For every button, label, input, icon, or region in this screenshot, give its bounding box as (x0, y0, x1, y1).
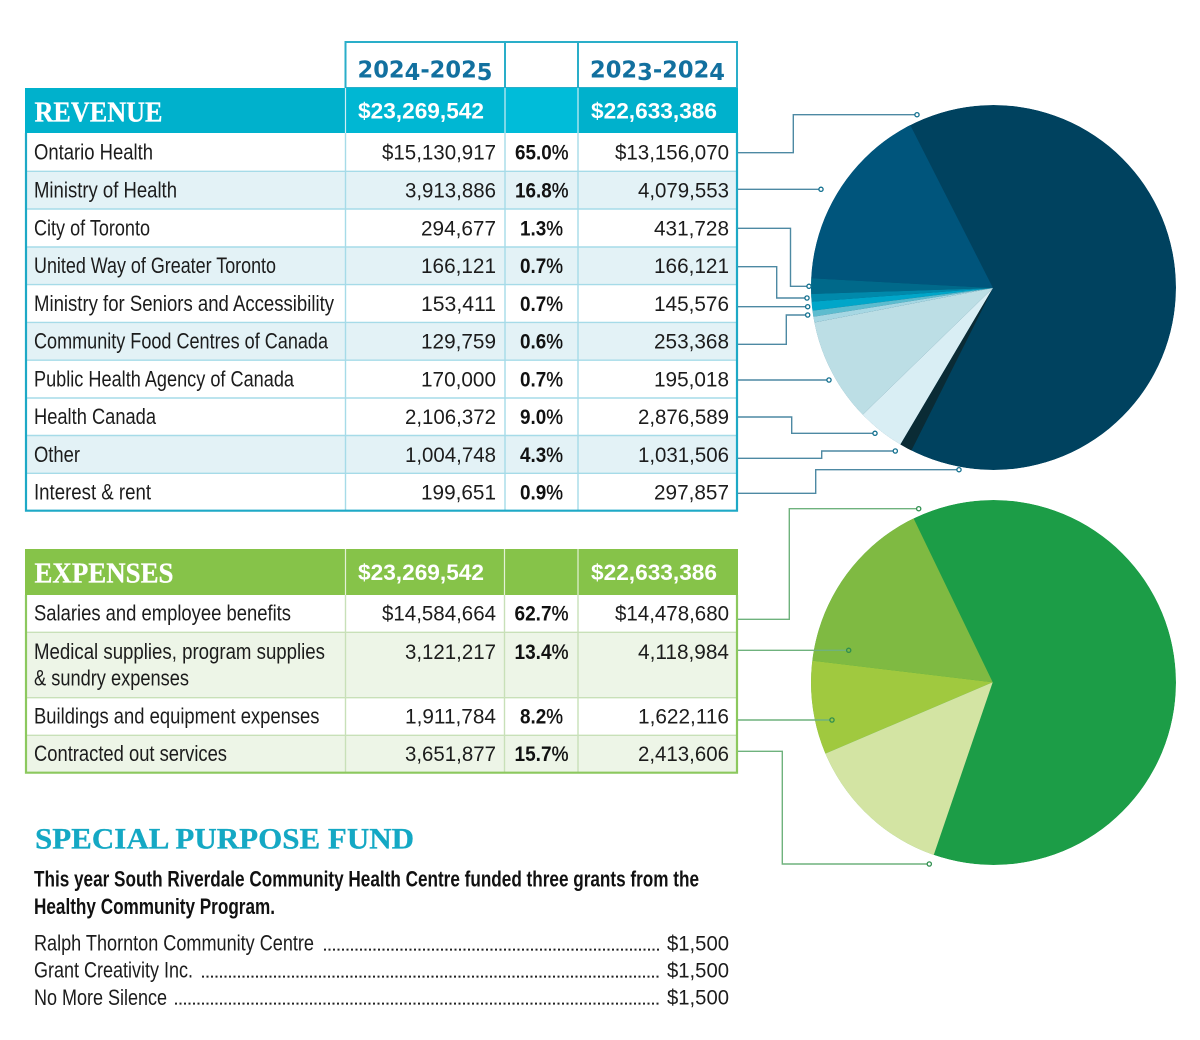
revenue row: Other: 4.3% (520, 443, 563, 467)
revenue row: Ontario Health: Ontario Health (34, 140, 153, 165)
pie chart: revenue (811, 105, 1176, 470)
revenue row: Interest & rent: Interest & rent (34, 480, 151, 505)
grant: Ralph Thornton Community Centre: Ralph Thornton Community Centre (34, 931, 314, 956)
revenue header band (25, 88, 738, 133)
revenue row: Community Food Centres of Canada: 0.6% (520, 330, 563, 354)
expenses row: Medical supplies: Medical supplies, program supplies (34, 639, 325, 664)
grant: Ralph Thornton Community Centre (34, 931, 729, 956)
expenses row: Contracted out services: 2,413,606 (638, 742, 729, 766)
revenue header band: REVENUE (34, 98, 162, 129)
expenses row: Medical supplies: & sundry expenses (34, 666, 189, 691)
revenue row: Public Health Agency of Canada: 195,018 (654, 367, 729, 391)
revenue row: Ministry of Health: 4,079,553 (638, 178, 729, 202)
expenses header band: $23,269,542 (358, 560, 484, 585)
revenue row: Community Food Centres of Canada (34, 329, 729, 354)
revenue row backgrounds and grid (26, 133, 737, 511)
revenue row: Ontario Health (34, 140, 729, 165)
revenue header band: $22,633,386 (591, 98, 717, 124)
expenses row: Buildings and equipment expenses: 1,911,784 (405, 704, 496, 728)
revenue row: Public Health Agency of Canada: 0.7% (520, 367, 563, 391)
year column headings: -202 (653, 58, 709, 84)
revenue row: Health Canada: 2,876,589 (638, 405, 729, 429)
expenses row: Contracted out services: Contracted out services (34, 741, 227, 766)
revenue row: Ministry of Health: 16.8% (515, 178, 569, 202)
revenue row: Ontario Health: $15,130,917 (382, 141, 496, 165)
revenue row: Ministry for Seniors and Accessibility: Ministry for Seniors and Accessibility (34, 291, 334, 316)
expenses row: Salaries and employee benefits: Salaries and employee benefits (34, 601, 291, 626)
revenue row: City of Toronto: City of Toronto (34, 215, 150, 240)
expenses row: Buildings and equipment expenses: Buildings and equipment expenses (34, 703, 320, 728)
expenses row: Medical supplies: 3,121,217 (405, 640, 496, 664)
revenue row: City of Toronto: 431,728 (654, 216, 729, 240)
revenue row: Health Canada: 9.0% (520, 405, 563, 429)
expenses row: Salaries and employee benefits: $14,584,664 (382, 602, 496, 626)
intro text (34, 867, 699, 919)
revenue row: City of Toronto: 1.3% (520, 216, 563, 240)
grant: Grant Creativity Inc.: $1,500 (667, 958, 729, 982)
revenue row: Other (34, 442, 729, 467)
revenue row: Ministry for Seniors and Accessibility: 0.7% (520, 292, 563, 316)
expenses row: Contracted out services: 15.7% (514, 742, 568, 766)
revenue row: United Way of Greater Toronto: 0.7% (520, 254, 563, 278)
expenses row: Salaries and employee benefits (34, 601, 729, 626)
revenue row: United Way of Greater Toronto: 166,121 (654, 254, 729, 278)
revenue row: Interest & rent: 297,857 (654, 481, 729, 505)
expenses row: Medical supplies (34, 639, 729, 691)
panel: revenue table (25, 42, 738, 511)
revenue row: Public Health Agency of Canada (34, 366, 729, 391)
expenses row: Buildings and equipment expenses: 8.2% (520, 704, 563, 728)
revenue row: Interest & rent (34, 480, 729, 505)
revenue row: City of Toronto (34, 215, 729, 240)
revenue row: Other: 1,031,506 (638, 443, 729, 467)
expenses row: Medical supplies: 4,118,984 (638, 640, 729, 664)
revenue row: Public Health Agency of Canada: Public Health Agency of Canada (34, 366, 295, 391)
revenue row: Other: 1,004,748 (405, 443, 496, 467)
revenue row: United Way of Greater Toronto: 166,121 (421, 254, 496, 278)
revenue row: Other: Other (34, 442, 80, 467)
revenue header band: $23,269,542 (358, 98, 484, 124)
revenue row: Ministry of Health: 3,913,886 (405, 178, 496, 202)
revenue row: United Way of Greater Toronto: United Way of Greater Toronto (34, 253, 276, 278)
pie chart: expenses (811, 500, 1176, 865)
revenue row: Ministry of Health: Ministry of Health (34, 178, 177, 202)
revenue row: City of Toronto: 294,677 (421, 216, 496, 240)
revenue row: Ministry of Health (34, 178, 729, 202)
expenses header band: $22,633,386 (591, 560, 717, 585)
grant: Ralph Thornton Community Centre: $1,500 (667, 932, 729, 956)
leader lines: expenses table to pie (738, 507, 931, 866)
expenses row: Salaries and employee benefits: 62.7% (514, 602, 568, 626)
expenses row: Salaries and employee benefits: $14,478,680 (615, 602, 729, 626)
expenses header band (25, 549, 738, 595)
intro text: This year South Riverdale Community Health Centre funded three grants from the (34, 867, 699, 892)
revenue row: Ontario Health: $13,156,070 (615, 141, 729, 165)
revenue row: United Way of Greater Toronto (34, 253, 729, 278)
expenses row: Buildings and equipment expenses (34, 703, 729, 728)
revenue row: Health Canada: 2,106,372 (405, 405, 496, 429)
grant: No More Silence (34, 985, 729, 1010)
revenue row: Ministry for Seniors and Accessibility: 145,576 (654, 292, 729, 316)
expenses row backgrounds and grid (26, 595, 737, 773)
revenue row: Ministry for Seniors and Accessibility (34, 291, 729, 316)
revenue row: Health Canada (34, 404, 729, 429)
grant: Grant Creativity Inc.: Grant Creativity Inc. (34, 958, 193, 983)
year column headings: 202 (590, 58, 638, 84)
year column headings: 5 (477, 60, 492, 86)
year column headings: 3 (637, 60, 653, 86)
year column headings: 4 (709, 60, 725, 86)
expenses row: Buildings and equipment expenses: 1,622,116 (638, 704, 729, 728)
revenue row: Community Food Centres of Canada: 129,759 (421, 330, 496, 354)
year column headings: 4 (405, 60, 420, 86)
grant: No More Silence: No More Silence (34, 985, 167, 1010)
revenue row: Ontario Health: 65.0% (515, 141, 569, 165)
panel: expenses table (25, 549, 738, 773)
intro text: Healthy Community Program. (34, 894, 275, 919)
leader lines: revenue table to pie (738, 113, 961, 493)
revenue row: Community Food Centres of Canada: 253,368 (654, 330, 729, 354)
expenses row: Medical supplies: 13.4% (514, 640, 568, 664)
year column headings (346, 42, 737, 88)
expenses row: Contracted out services: 3,651,877 (405, 742, 496, 766)
expenses row: Contracted out services (34, 741, 729, 766)
revenue row: Ministry for Seniors and Accessibility: 153,411 (421, 292, 496, 316)
grant: Grant Creativity Inc. (34, 958, 729, 983)
revenue row: Public Health Agency of Canada: 170,000 (421, 367, 496, 391)
expenses header band: EXPENSES (34, 559, 174, 590)
revenue row: Interest & rent: 0.9% (520, 481, 563, 505)
year column headings: 202 (358, 58, 406, 84)
revenue row: Interest & rent: 199,651 (421, 481, 496, 505)
panel: special purpose fund (34, 823, 729, 1010)
year column headings: -202 (420, 58, 477, 84)
revenue row: Health Canada: Health Canada (34, 404, 157, 429)
grant: No More Silence: $1,500 (667, 986, 729, 1010)
revenue row: Community Food Centres of Canada: Community Food Centres of Canada (34, 329, 329, 354)
heading: SPECIAL PURPOSE FUND (35, 823, 414, 856)
